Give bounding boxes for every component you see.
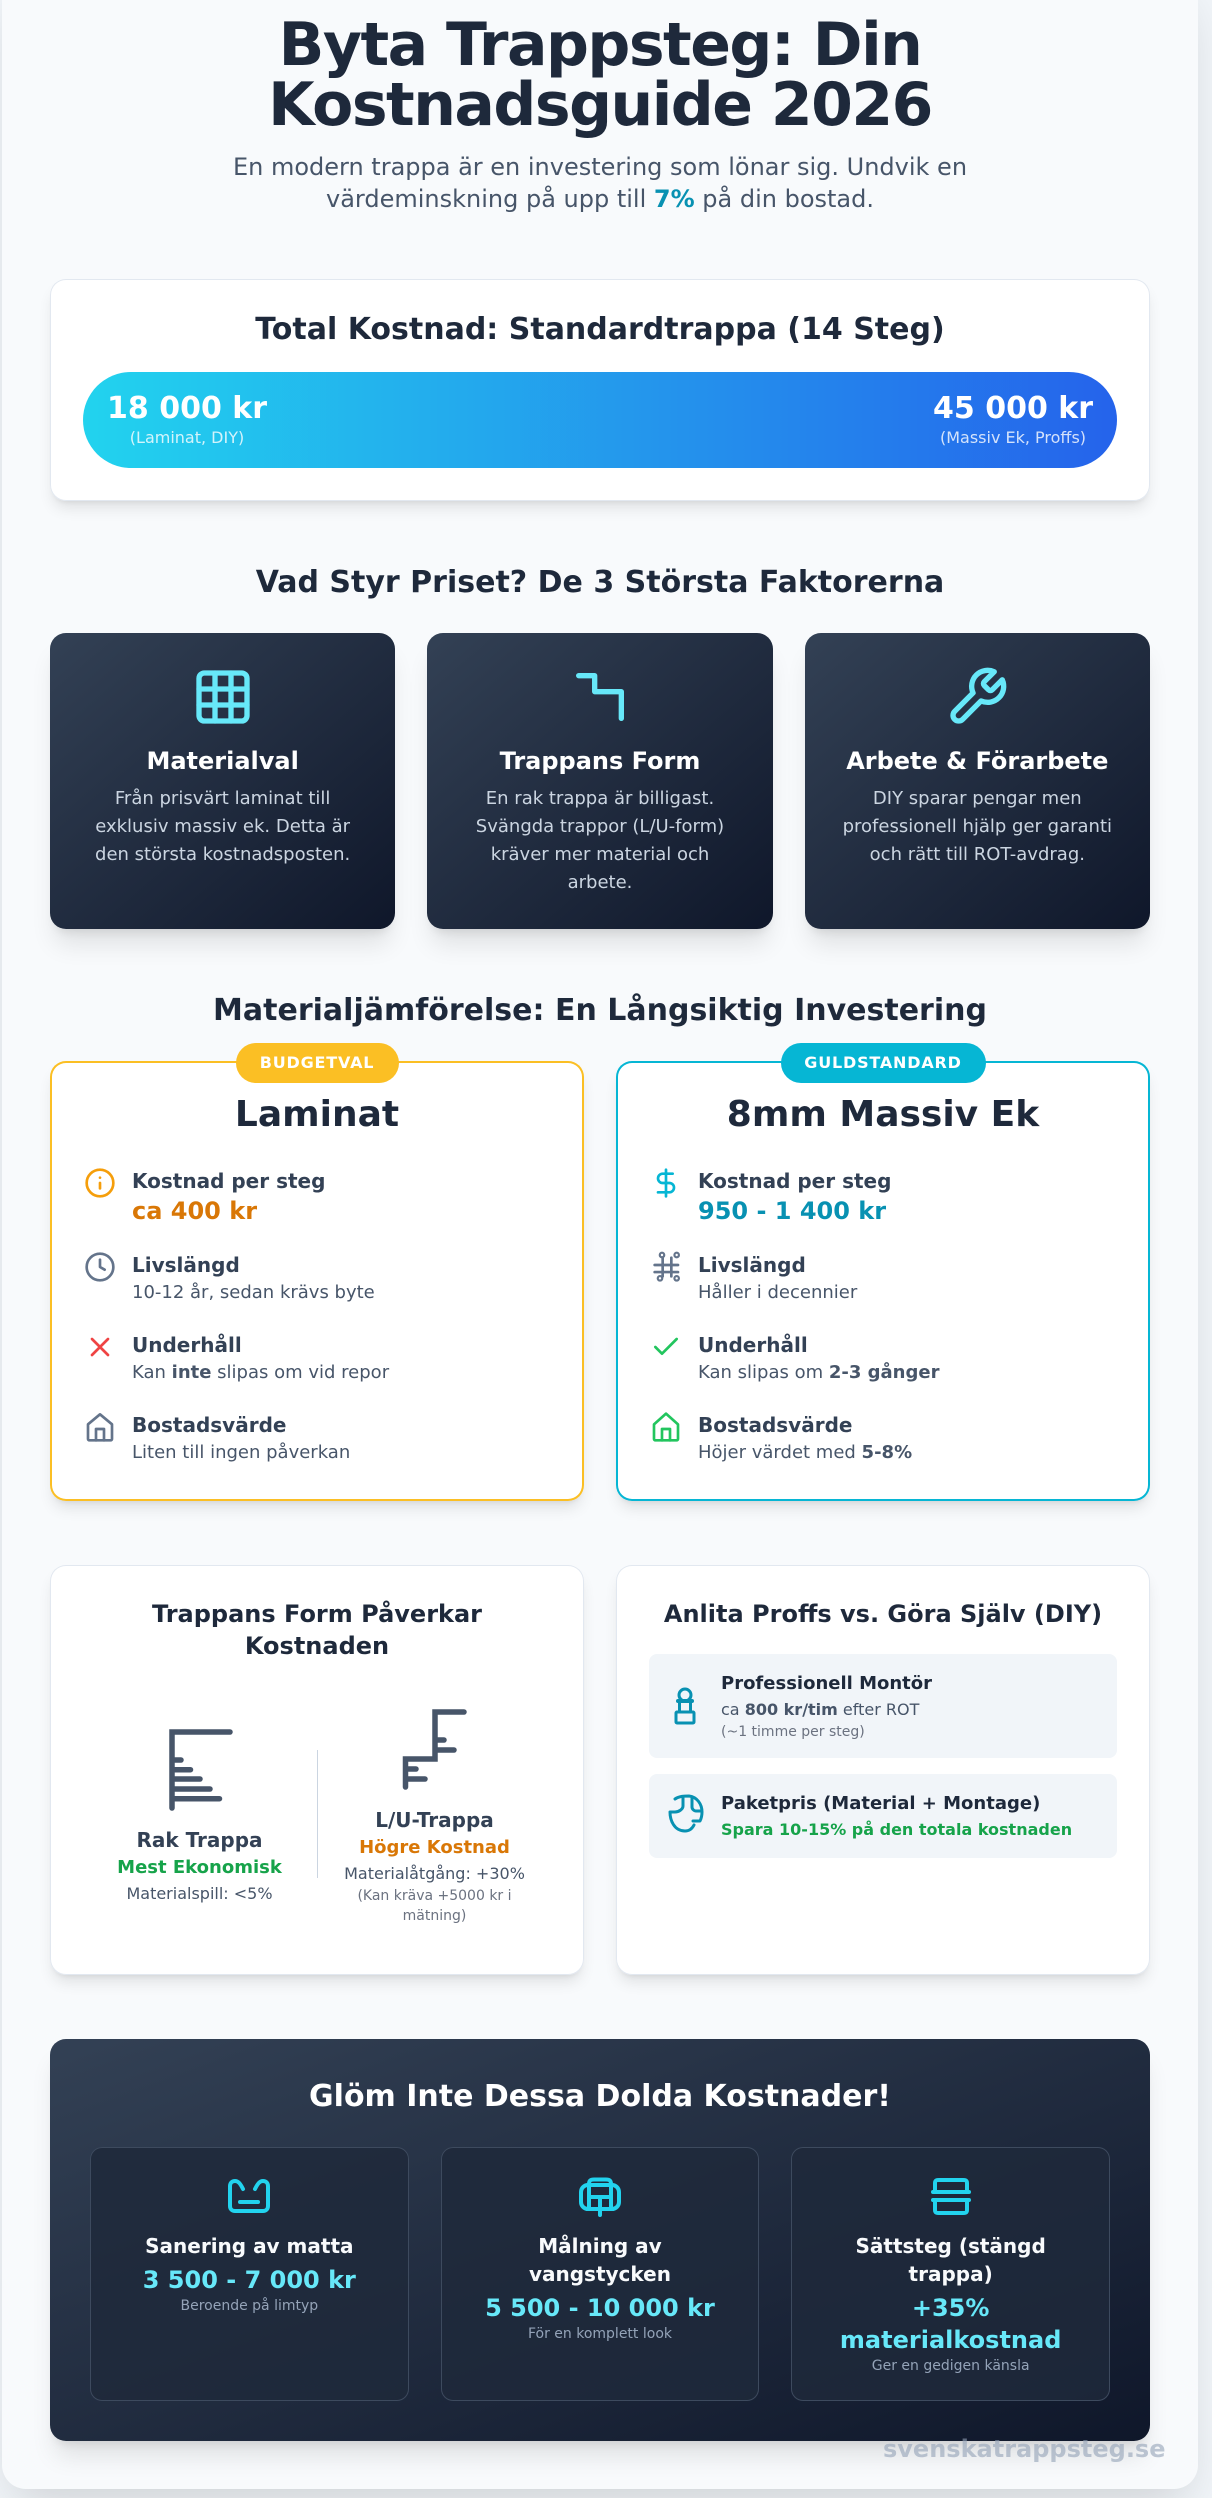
stair form heading: Trappans Form Påverkar bbox=[152, 1600, 482, 1628]
factor text: DIY sparar pengar men bbox=[873, 788, 1082, 809]
panel: factor labour bbox=[805, 633, 1150, 929]
row: home value: Liten till ingen påverkan bbox=[132, 1442, 350, 1463]
L/U stair column: (Kan kräva +5000 kr i bbox=[357, 1888, 512, 1904]
row: maintenance: Kan slipas om 2-3 gånger bbox=[698, 1362, 939, 1383]
row: home value: Höjer värdet med 5-8% bbox=[698, 1442, 912, 1463]
straight stair column: Rak Trappa bbox=[136, 1828, 263, 1852]
card: carpet removal: Beroende på limtyp bbox=[180, 2298, 318, 2314]
card: risers: trappa) bbox=[909, 2262, 993, 2286]
factors heading: Vad Styr Priset? De 3 Största Faktorerna bbox=[256, 565, 944, 600]
row: home value: Bostadsvärde bbox=[132, 1413, 286, 1437]
row: cost bbox=[85, 1168, 325, 1225]
icon: wrench bbox=[950, 668, 1006, 724]
hidden costs heading: Glöm Inte Dessa Dolda Kostnader! bbox=[309, 2079, 891, 2114]
badge: budget choice bbox=[236, 1043, 398, 1083]
icon: house bbox=[86, 1413, 114, 1442]
material comparison heading: Materialjämförelse: En Långsiktig Investering bbox=[213, 993, 987, 1028]
card: risers bbox=[791, 2147, 1110, 2401]
badge: budget choice: BUDGETVAL bbox=[260, 1053, 374, 1072]
panel: pro vs DIY bbox=[616, 1565, 1150, 1975]
low price bbox=[107, 391, 267, 447]
icon: info bbox=[85, 1168, 115, 1198]
icon: straight stair bbox=[169, 1729, 233, 1811]
icon: carpet bbox=[228, 2179, 270, 2213]
card: risers: Ger en gedigen känsla bbox=[872, 2358, 1030, 2374]
factor text bbox=[476, 788, 724, 893]
panel: massive oak bbox=[616, 1061, 1150, 1501]
card: risers: Sättsteg (stängd bbox=[856, 2234, 1046, 2258]
stair form heading: Kostnaden bbox=[245, 1632, 389, 1660]
icon: material grid bbox=[196, 670, 250, 724]
card: risers: materialkostnad bbox=[840, 2326, 1061, 2354]
L/U stair column: Materialåtgång: +30% bbox=[344, 1864, 525, 1883]
factor text: professionell hjälp ger garanti bbox=[843, 816, 1112, 837]
high price: (Massiv Ek, Proffs) bbox=[940, 428, 1086, 447]
factor text: Svängda trappor (L/U-form) bbox=[476, 816, 724, 837]
row: cost: 950 - 1 400 kr bbox=[698, 1197, 886, 1225]
icon: risers bbox=[931, 2178, 971, 2215]
icon: hash with loops bbox=[653, 1252, 680, 1282]
box: professional installer: (~1 timme per steg) bbox=[721, 1724, 865, 1740]
icon: package bbox=[668, 1794, 704, 1832]
icon: green house bbox=[652, 1412, 680, 1442]
icon: painting kit bbox=[579, 2178, 621, 2217]
straight stair column: Mest Ekonomisk bbox=[117, 1857, 282, 1878]
card: stringer painting: vangstycken bbox=[529, 2262, 671, 2286]
title bbox=[268, 10, 932, 140]
icon: check bbox=[654, 1338, 678, 1356]
icon: stair step bbox=[576, 673, 624, 721]
card: stringer painting: För en komplett look bbox=[528, 2326, 672, 2342]
card: carpet removal bbox=[90, 2147, 409, 2401]
watermark: svenskatrappsteg.se bbox=[883, 2435, 1166, 2463]
row: home value bbox=[86, 1413, 350, 1463]
row: maintenance bbox=[90, 1333, 390, 1383]
factor text: exklusiv massiv ek. Detta är bbox=[95, 816, 350, 837]
panel: hidden costs bbox=[50, 2039, 1150, 2441]
row: cost bbox=[656, 1168, 891, 1225]
card: stringer painting: Målning av bbox=[538, 2234, 662, 2258]
row: lifespan: Livslängd bbox=[132, 1253, 240, 1277]
L/U stair column: mätning) bbox=[403, 1908, 466, 1924]
factor text: kräver mer material och bbox=[491, 844, 709, 865]
factor text bbox=[95, 788, 350, 865]
panel: factor material bbox=[50, 633, 395, 929]
row: lifespan: Livslängd bbox=[698, 1253, 806, 1277]
row: maintenance: Kan inte slipas om vid repor bbox=[132, 1362, 389, 1383]
low price: 18 000 kr bbox=[107, 391, 267, 426]
row: cost: Kostnad per steg bbox=[698, 1169, 891, 1193]
factor text: Från prisvärt laminat till bbox=[115, 788, 330, 809]
title: Byta Trappsteg: Din bbox=[279, 10, 921, 80]
straight stair column bbox=[117, 1729, 282, 1903]
panel: stair form bbox=[50, 1565, 584, 1975]
stair form heading bbox=[152, 1600, 482, 1660]
row: lifespan bbox=[85, 1252, 375, 1303]
card: stringer painting: 5 500 - 10 000 kr bbox=[485, 2294, 715, 2322]
card: stringer painting bbox=[441, 2147, 759, 2401]
row: cost: ca 400 kr bbox=[132, 1197, 257, 1225]
factor text bbox=[843, 788, 1112, 865]
subtitle: värdeminskning på upp till 7% på din bostad. bbox=[326, 185, 874, 213]
row: maintenance: Underhåll bbox=[132, 1333, 242, 1357]
row: home value bbox=[652, 1412, 912, 1463]
divider bbox=[317, 1750, 318, 1878]
factor title: Materialval bbox=[146, 747, 299, 775]
badge: gold standard bbox=[780, 1043, 986, 1083]
card: carpet removal: 3 500 - 7 000 kr bbox=[143, 2266, 356, 2294]
gradient price range bar bbox=[83, 372, 1117, 468]
factor text: och rätt till ROT-avdrag. bbox=[870, 844, 1085, 865]
factor title: Arbete & Förarbete bbox=[846, 747, 1108, 775]
row: maintenance: Underhåll bbox=[698, 1333, 808, 1357]
box: package price: Spara 10-15% på den totala kostnaden bbox=[721, 1820, 1072, 1839]
high price bbox=[933, 391, 1093, 447]
box: professional installer bbox=[649, 1654, 1117, 1758]
subtitle: En modern trappa är en investering som lönar sig. Undvik en bbox=[233, 153, 967, 181]
straight stair column: Materialspill: <5% bbox=[126, 1884, 273, 1903]
box: professional installer: ca 800 kr/tim efter ROT bbox=[721, 1700, 919, 1719]
icon: clock bbox=[85, 1252, 115, 1282]
L/U stair column: L/U-Trappa bbox=[375, 1808, 494, 1832]
factor text: En rak trappa är billigast. bbox=[486, 788, 714, 809]
factor text: den största kostnadsposten. bbox=[95, 844, 350, 865]
card: risers: +35% bbox=[912, 2294, 989, 2322]
massive oak title: 8mm Massiv Ek bbox=[727, 1094, 1039, 1135]
L/U stair column: Högre Kostnad bbox=[359, 1837, 510, 1858]
panel: laminat bbox=[50, 1061, 584, 1501]
pro vs DIY heading: Anlita Proffs vs. Göra Själv (DIY) bbox=[664, 1600, 1102, 1628]
box: package price bbox=[649, 1774, 1117, 1858]
row: home value: Bostadsvärde bbox=[698, 1413, 852, 1437]
subtitle bbox=[233, 153, 967, 213]
row: lifespan: 10-12 år, sedan krävs byte bbox=[132, 1282, 375, 1303]
row: cost: Kostnad per steg bbox=[132, 1169, 325, 1193]
laminat title: Laminat bbox=[235, 1094, 399, 1135]
low price: (Laminat, DIY) bbox=[130, 428, 244, 447]
icon: dollar bbox=[656, 1168, 676, 1198]
panel: factor stair form bbox=[427, 633, 773, 929]
card: carpet removal: Sanering av matta bbox=[145, 2234, 354, 2258]
L/U stair column bbox=[344, 1709, 525, 1924]
box: professional installer: Professionell Montör bbox=[721, 1673, 932, 1694]
row: maintenance bbox=[654, 1333, 940, 1383]
factor text: arbete. bbox=[568, 872, 632, 893]
icon: cross bbox=[90, 1338, 110, 1356]
total cost heading: Total Kostnad: Standardtrappa (14 Steg) bbox=[255, 312, 945, 347]
badge: gold standard: GULDSTANDARD bbox=[804, 1053, 962, 1072]
factor title: Trappans Form bbox=[500, 747, 700, 775]
box: package price: Paketpris (Material + Montage) bbox=[721, 1793, 1040, 1814]
high price: 45 000 kr bbox=[933, 391, 1093, 426]
row: lifespan bbox=[653, 1252, 858, 1303]
row: lifespan: Håller i decennier bbox=[698, 1282, 857, 1303]
title: Kostnadsguide 2026 bbox=[268, 70, 932, 140]
icon: installer bbox=[674, 1688, 696, 1724]
panel: total cost bbox=[50, 279, 1150, 501]
icon: L/U stair bbox=[402, 1709, 467, 1790]
